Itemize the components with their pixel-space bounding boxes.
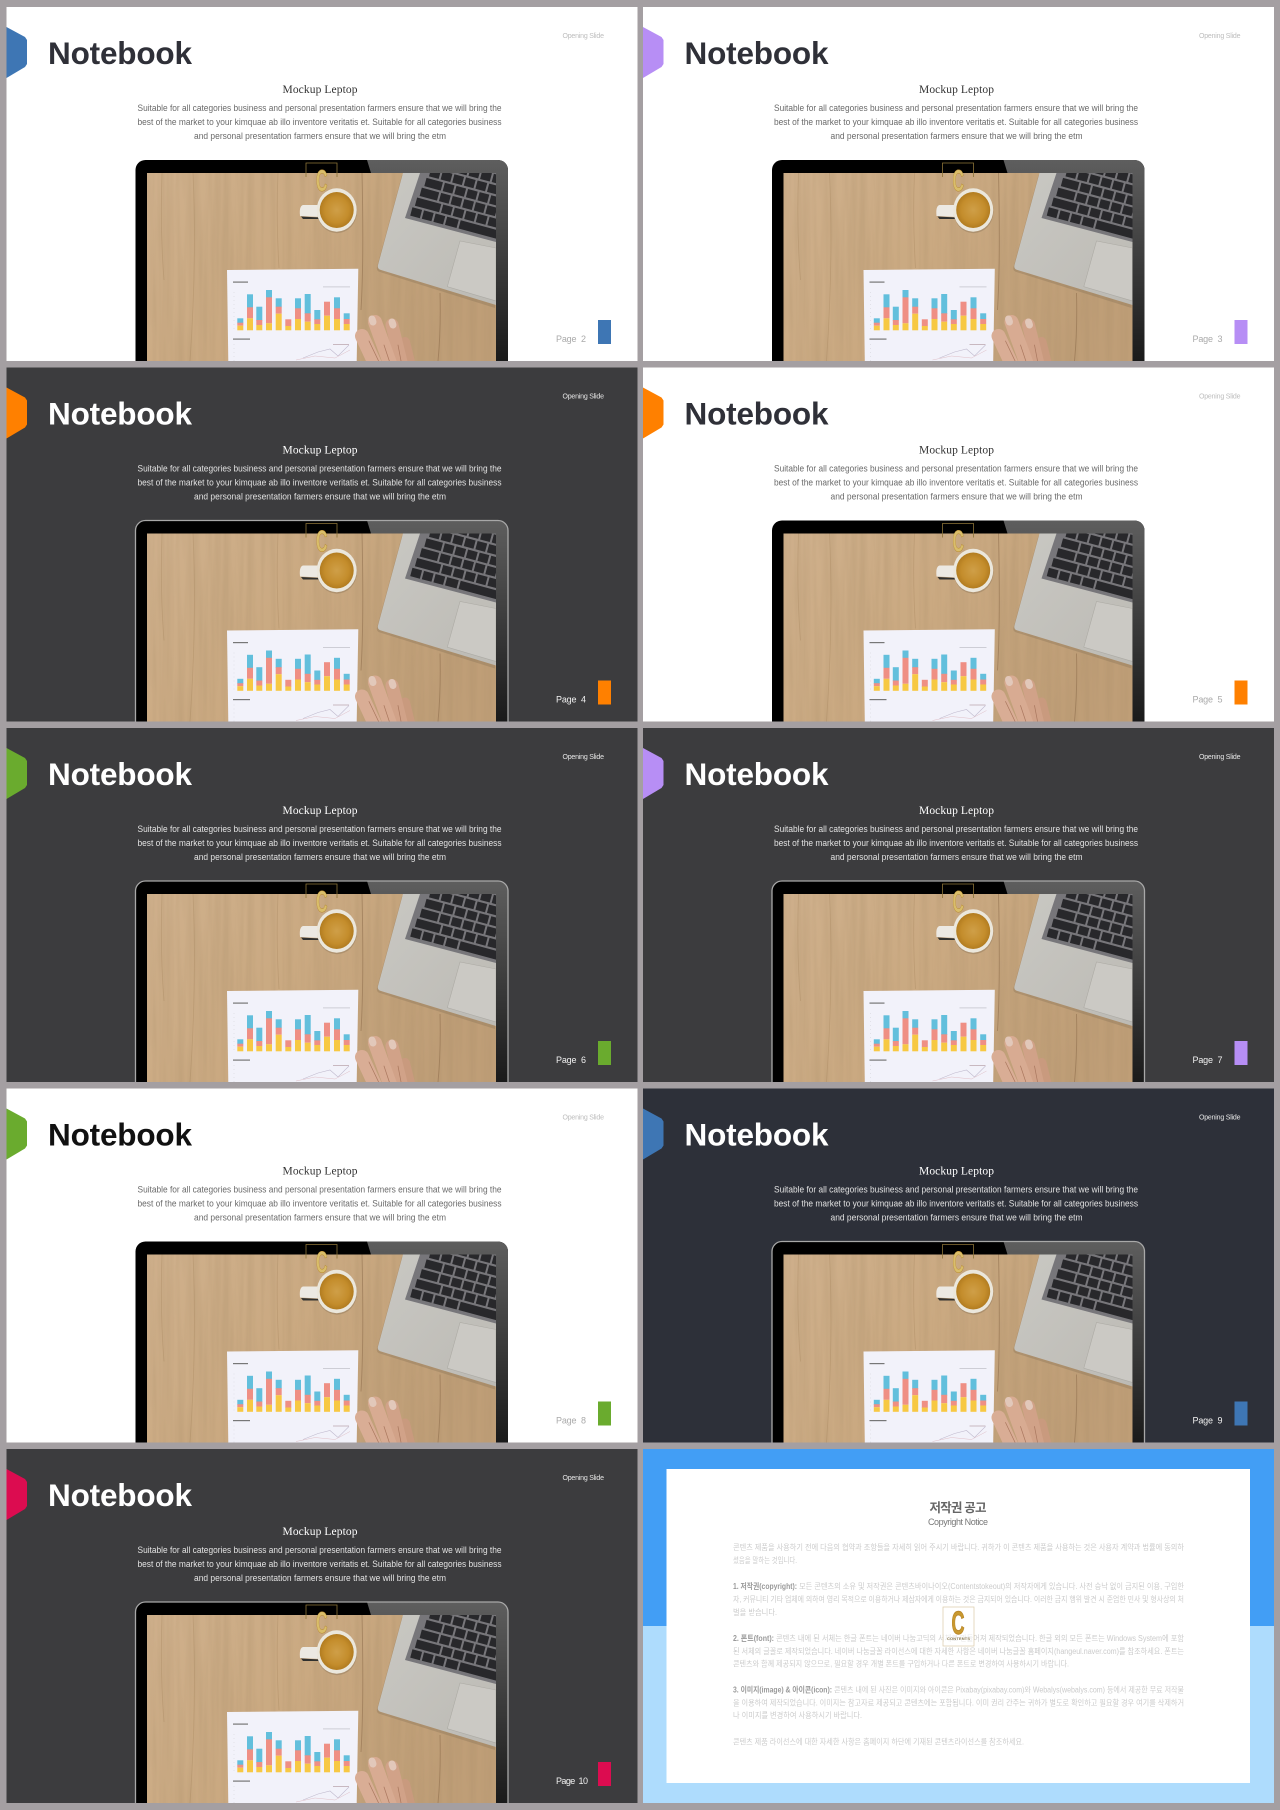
subtitle: Mockup Leptop (282, 84, 358, 96)
slide 10: copyright notice (643, 1449, 1274, 1803)
section label: Opening Slide (562, 33, 604, 40)
page number: Page 4 (556, 694, 586, 704)
slide 1: white, blue (6, 7, 638, 366)
body text: best of the market to your kimquae ab illo inventore veritatis et. Suitable for all categories business (138, 838, 502, 848)
body text: Suitable for all categories business and personal presentation farmers ensure that we will bring the (774, 464, 1138, 474)
hexagon accent (6, 1469, 27, 1520)
paragraph 1: copyright (733, 1581, 1185, 1617)
paragraph 3: image and icon: 을 이용하여 제작되었습니다. 이미지는 참고자료 제공되고 콘텐츠에는 포함됩니다. 이미 권리 간주는 귀하가 별도로 확인하고 필요할 경우 여기를 삭제하거 (733, 1698, 1184, 1708)
slide background (643, 1088, 1274, 1442)
body text: and personal presentation farmers ensure that we will bring the etm (830, 131, 1082, 141)
body text: best of the market to your kimquae ab illo inventore veritatis et. Suitable for all categories business (138, 1559, 502, 1569)
page tab (1234, 1402, 1248, 1426)
body text (774, 103, 1138, 141)
page number: Page 3 (1192, 334, 1222, 344)
slide background (6, 728, 638, 1082)
intro paragraph (733, 1542, 1185, 1565)
page tab (598, 1762, 611, 1786)
body text: and personal presentation farmers ensure that we will bring the etm (830, 852, 1082, 862)
laptop outline (136, 520, 508, 722)
body text: Suitable for all categories business and personal presentation farmers ensure that we will bring the (774, 1184, 1138, 1194)
paragraph 3: image and icon: 3. 이미지(image) & 아이콘(icon): (733, 1684, 832, 1694)
section label: Opening Slide (562, 394, 604, 400)
body text (774, 824, 1138, 862)
paragraph 2: font: 된 서체의 글꼴로 제작되었습니다. 네이버 나눔글꼴 라이선스에 대한 자세한 사항은 네이버 나눔글꼴 홈페이지(hangeul.naver.com)를 참조하세요. 폰트는 (733, 1646, 1184, 1656)
page tab (598, 1402, 611, 1426)
page tab (1234, 1041, 1248, 1065)
page tab (598, 1041, 611, 1065)
body text: best of the market to your kimquae ab illo inventore veritatis et. Suitable for all categories business (774, 117, 1138, 127)
body text: Suitable for all categories business and personal presentation farmers ensure that we will bring the (138, 824, 502, 834)
slide 4: white, orange (643, 368, 1274, 726)
notice subheading: Copyright Notice (928, 1517, 988, 1527)
slide background (643, 368, 1274, 722)
subtitle: Mockup Leptop (282, 1526, 358, 1538)
laptop mockup photo (772, 1241, 1180, 1448)
body text: and personal presentation farmers ensure that we will bring the etm (194, 131, 446, 141)
intro paragraph: 셨음을 말하는 것입니다. (733, 1555, 797, 1565)
body text: best of the market to your kimquae ab illo inventore veritatis et. Suitable for all categories business (774, 1198, 1138, 1208)
page number: Page 2 (556, 334, 586, 344)
slide 9: dark, crimson (6, 1449, 638, 1808)
page number: Page 9 (1192, 1416, 1222, 1426)
white notice panel (666, 1469, 1250, 1783)
body text (138, 103, 502, 141)
page number: Page 10 (556, 1776, 588, 1786)
paragraph 1: copyright: 1. 저작권(copyright): (733, 1581, 797, 1591)
section label: Opening Slide (562, 754, 604, 761)
paragraph 1: copyright: 모든 콘텐츠의 소유 및 저작권은 콘텐츠바이나이오(Contentstokeout)의 저작자에게 있습니다. 사전 승낙 없이 금지된 이용, 구입한 (799, 1581, 1185, 1591)
body text (138, 1545, 502, 1583)
body text: Suitable for all categories business and personal presentation farmers ensure that we will bring the (774, 103, 1138, 113)
slide 8: navy, blue (643, 1088, 1274, 1448)
slide 6: dark, purple (643, 728, 1274, 1087)
slide 2: white, purple (643, 7, 1274, 366)
light blue lower background (643, 1626, 1274, 1803)
page number: Page 8 (556, 1416, 586, 1426)
section label: Opening Slide (1199, 754, 1241, 761)
body text (138, 1184, 502, 1222)
laptop mockup photo (136, 520, 543, 726)
slide background (643, 7, 1274, 361)
paragraph 1: copyright: 자, 커뮤니티 기타 업체에 의하여 영리 목적으로 이용하거나 제삼자에게 이용하는 것은 금지되어 있습니다. 이러한 금지 행위 발견 시 준엄한 민사 및 형사상의 처 (733, 1594, 1184, 1604)
blue upper background (643, 1449, 1274, 1626)
laptop mockup photo (136, 1241, 543, 1448)
body text: and personal presentation farmers ensure that we will bring the etm (830, 492, 1082, 502)
body text (774, 1184, 1138, 1222)
body text: best of the market to your kimquae ab illo inventore veritatis et. Suitable for all categories business (138, 1198, 502, 1208)
page tab (598, 680, 611, 704)
laptop mockup photo (772, 520, 1180, 726)
section label: Opening Slide (1199, 1114, 1241, 1122)
laptop outline (136, 1602, 508, 1803)
hexagon accent (6, 27, 27, 78)
slide background (6, 7, 638, 361)
laptop mockup photo (136, 881, 543, 1087)
intro paragraph: 콘텐츠 제품을 사용하기 전에 다음의 협약과 조항들을 자세히 읽어 주시기 바랍니다. 귀하가 이 콘텐츠 제품을 사용하는 것은 사용자 계약과 법률에 동의하 (733, 1542, 1185, 1552)
laptop mockup photo (136, 1602, 543, 1808)
paragraph 2: font (733, 1633, 1185, 1668)
paragraph 2: font: 콘텐츠와 함께 제공되지 않으므로, 필요할 경우 개별 폰트를 구입하거나 다른 폰트로 변경하여 사용하시기 바랍니다. (733, 1658, 1069, 1668)
hexagon accent (6, 1108, 27, 1160)
section label: Opening Slide (1199, 394, 1241, 400)
body text: Suitable for all categories business and personal presentation farmers ensure that we will bring the (774, 824, 1138, 834)
body text (138, 464, 502, 502)
section label: Opening Slide (562, 1114, 604, 1122)
hexagon accent (6, 388, 27, 438)
laptop outline (772, 881, 1144, 1082)
paragraph 3: image and icon: 콘텐츠 내에 된 사진은 이미지와 아이콘은 Pixabay(pixabay.com)와 Webalys(webalys.com) 등에서 제공한 무료 저작물 (834, 1684, 1184, 1694)
page tab (598, 320, 611, 344)
slide background (6, 1449, 638, 1803)
page tab (1234, 680, 1248, 704)
title: Notebook (48, 756, 192, 792)
body text: and personal presentation farmers ensure that we will bring the etm (194, 852, 446, 862)
body text: Suitable for all categories business and personal presentation farmers ensure that we will bring the (138, 103, 502, 113)
slide 7: white, green (6, 1088, 638, 1448)
body text: Suitable for all categories business and personal presentation farmers ensure that we will bring the (138, 1545, 502, 1555)
body text: best of the market to your kimquae ab illo inventore veritatis et. Suitable for all categories business (138, 117, 502, 127)
slide background (643, 728, 1274, 1082)
page number: Page 6 (556, 1055, 586, 1065)
title: Notebook (684, 35, 829, 71)
slide 3: dark, orange (6, 368, 638, 726)
body text (774, 464, 1138, 502)
subtitle: Mockup Leptop (282, 1166, 358, 1178)
slide 5: dark, green (6, 728, 638, 1087)
subtitle: Mockup Leptop (919, 444, 994, 456)
subtitle: Mockup Leptop (919, 1166, 994, 1178)
watermark logo: CONTENTS (947, 1636, 970, 1641)
subtitle: Mockup Leptop (919, 84, 994, 96)
section label: Opening Slide (1199, 33, 1241, 40)
paragraph 1: copyright: 벌을 받습니다. (733, 1607, 777, 1617)
hexagon accent (643, 748, 664, 799)
laptop outline (136, 881, 508, 1082)
title: Notebook (48, 1116, 192, 1152)
hexagon accent (643, 388, 664, 438)
title: Notebook (684, 756, 829, 792)
body text: and personal presentation farmers ensure that we will bring the etm (194, 1212, 446, 1222)
slide background (6, 368, 638, 722)
section label: Opening Slide (562, 1475, 604, 1482)
body text: Suitable for all categories business and personal presentation farmers ensure that we will bring the (138, 1184, 502, 1194)
paragraph 2: font: 콘텐츠 내에 된 서체는 한글 폰트는 네이버 나눔고딕의 서체로 만들어져 제작되었습니다. 한글 외의 모든 폰트는 Windows System에 포함 (776, 1633, 1185, 1643)
closing paragraph: 콘텐츠 제품 라이선스에 대한 자세한 사항은 홈페이지 하단에 기재된 콘텐츠라이선스를 참조하세요. (733, 1736, 1024, 1746)
paragraph 3: image and icon: 나 이미지를 변경하여 사용하시기 바랍니다. (733, 1710, 862, 1720)
hexagon accent (6, 748, 27, 799)
title: Notebook (684, 1116, 829, 1152)
page number: Page 5 (1192, 694, 1222, 704)
subtitle: Mockup Leptop (282, 444, 358, 456)
page number: Page 7 (1192, 1055, 1222, 1065)
page tab (1234, 320, 1248, 344)
body text: best of the market to your kimquae ab illo inventore veritatis et. Suitable for all categories business (774, 478, 1138, 488)
slide background (6, 1088, 638, 1442)
laptop mockup photo (772, 881, 1180, 1087)
subtitle: Mockup Leptop (919, 805, 994, 817)
title: Notebook (48, 396, 192, 432)
body text: and personal presentation farmers ensure that we will bring the etm (194, 1573, 446, 1583)
body text: best of the market to your kimquae ab illo inventore veritatis et. Suitable for all categories business (774, 838, 1138, 848)
body text: and personal presentation farmers ensure that we will bring the etm (830, 1212, 1082, 1222)
subtitle: Mockup Leptop (282, 805, 358, 817)
watermark logo: C (952, 1605, 964, 1641)
paragraph 2: font: 2. 폰트(font): (733, 1634, 774, 1643)
laptop mockup photo (136, 160, 543, 366)
notice heading: 저작권 공고 (930, 1500, 986, 1515)
body text: best of the market to your kimquae ab illo inventore veritatis et. Suitable for all categories business (138, 478, 502, 488)
watermark logo (943, 1605, 974, 1646)
title: Notebook (48, 35, 192, 71)
body text: and personal presentation farmers ensure that we will bring the etm (194, 492, 446, 502)
title: Notebook (48, 1477, 192, 1513)
body text (138, 824, 502, 862)
hexagon accent (643, 1108, 664, 1160)
laptop outline (772, 1242, 1144, 1442)
laptop mockup photo (772, 160, 1180, 366)
body text: Suitable for all categories business and personal presentation farmers ensure that we will bring the (138, 464, 502, 474)
title: Notebook (684, 396, 829, 432)
hexagon accent (643, 27, 664, 78)
paragraph 3: image and icon (733, 1684, 1184, 1720)
